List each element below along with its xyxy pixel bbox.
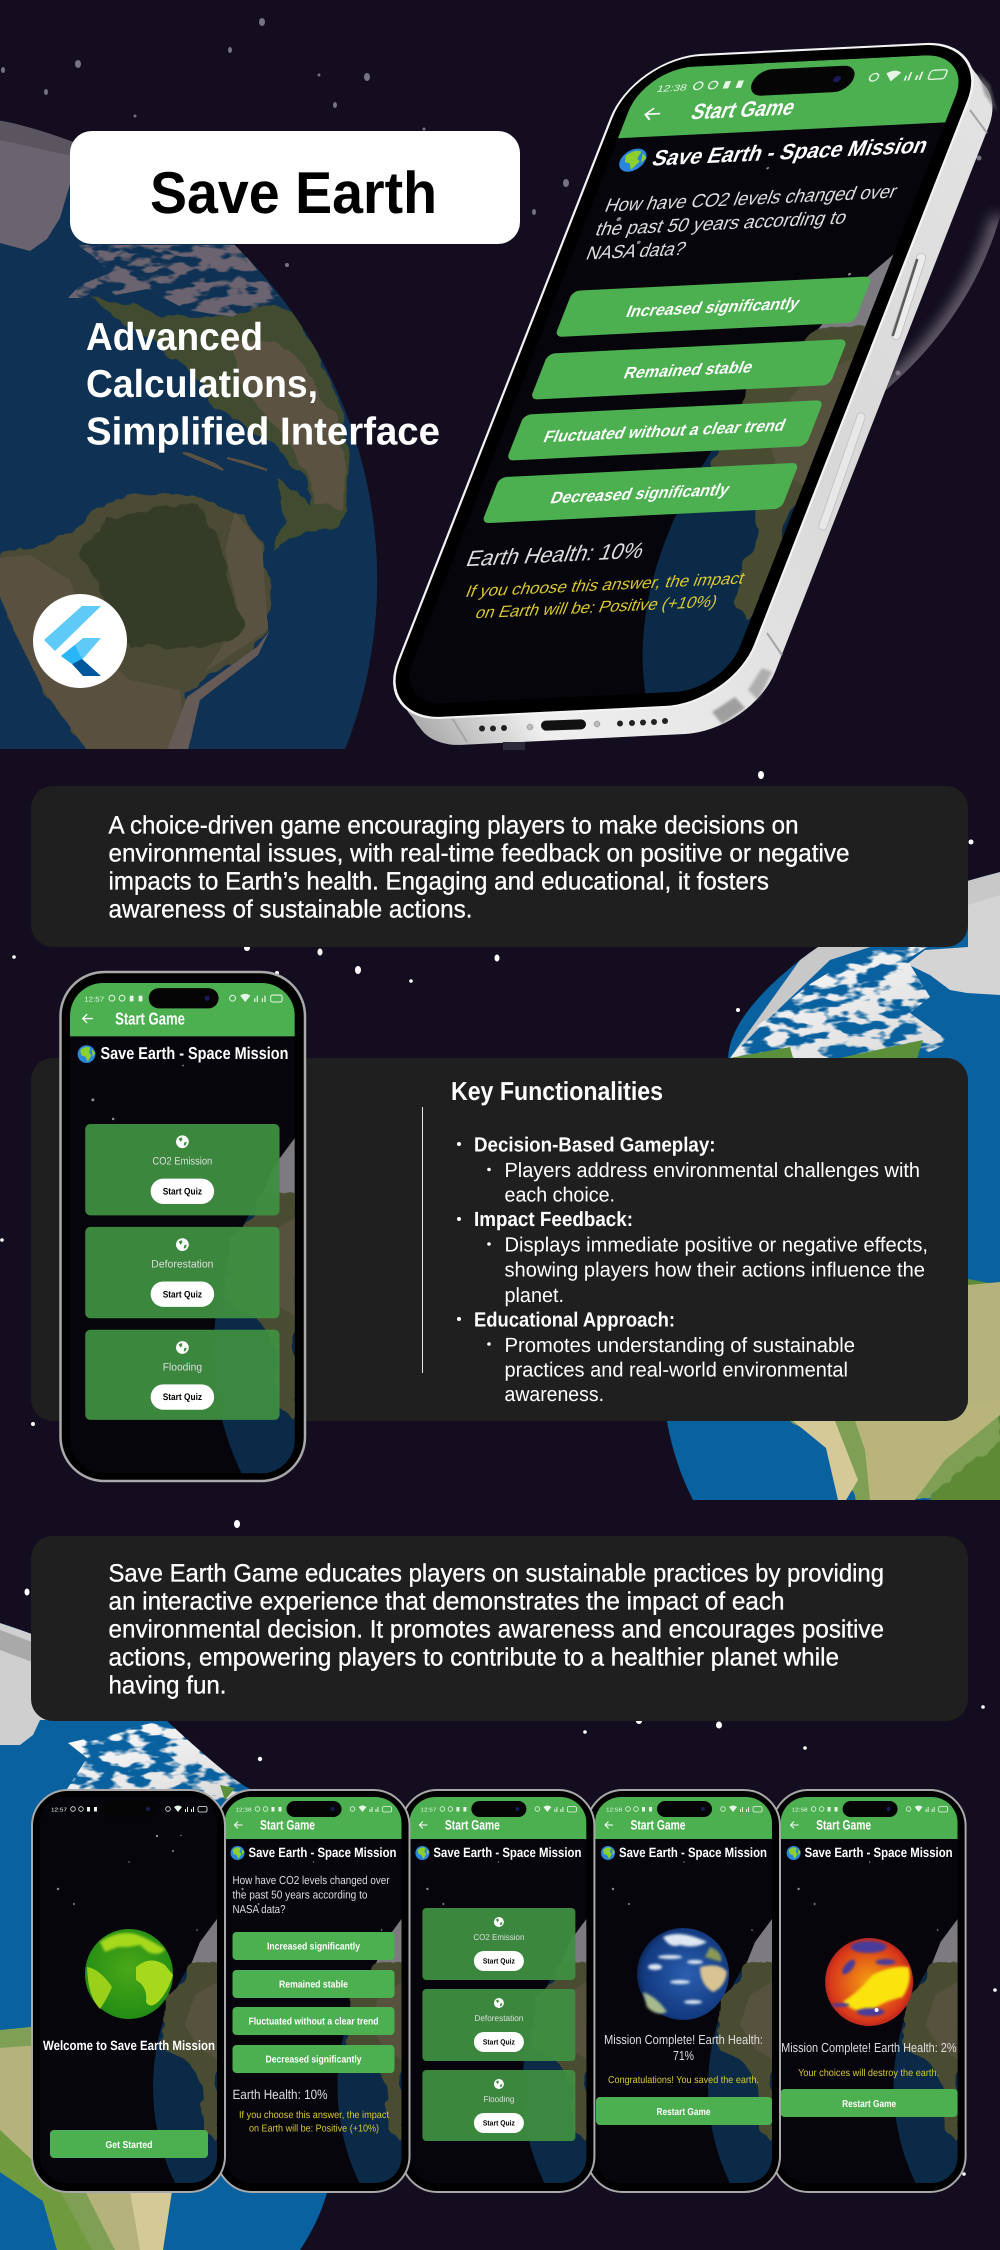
screen heading <box>619 138 926 172</box>
dark moon crescent behind hero phone <box>880 217 1000 395</box>
question text <box>586 186 898 260</box>
phone 2: question screen: Start Game <box>260 1818 315 1832</box>
phone 3: topic selection: Save Earth - Space Mission <box>433 1845 581 1860</box>
phone 2: question screen: 12:38 <box>236 1808 252 1814</box>
topic card: CO2: Start Quiz <box>483 1956 515 1966</box>
phone 4: saved earth ending: Save Earth - Space Mission <box>619 1845 767 1860</box>
panel: educational summary: an interactive experience that demonstrates the impact of each <box>108 1588 784 1616</box>
phone body extrusion <box>379 46 1000 748</box>
feature list: Displays immediate positive or negative effects, <box>504 1234 928 1256</box>
topic card: flooding: Flooding <box>163 1360 202 1373</box>
topic card: deforestation: Deforestation <box>474 2013 524 2023</box>
question text <box>232 1875 390 1916</box>
title card <box>70 131 520 244</box>
phone 4: saved earth ending: Congratulations! You saved the earth. <box>608 2075 759 2086</box>
hero subtitle: Simplified Interface <box>86 410 440 454</box>
question text: NASA data? <box>232 1904 286 1916</box>
phone 3: topic selection: Start Game <box>445 1818 500 1832</box>
hero phone <box>393 42 998 750</box>
topic card: flooding <box>85 1330 280 1420</box>
feature list: planet. <box>504 1284 564 1307</box>
panel: educational summary: having fun. <box>108 1671 226 1699</box>
starfield: hero (dim) <box>1 18 982 376</box>
result text: Mission Complete! Earth Health: 2% <box>781 2040 957 2055</box>
panel: intro description: environmental issues, with real-time feedback on positive or negative <box>108 839 850 867</box>
icon: flutter logo <box>33 594 127 688</box>
title card: Save Earth <box>150 160 437 226</box>
feature list: practices and real-world environmental <box>504 1359 848 1382</box>
question text: How have CO2 levels changed over <box>232 1875 390 1887</box>
feature list: showing players how their actions influence the <box>504 1259 925 1282</box>
heading: key functionalities: Key Functionalities <box>451 1076 663 1106</box>
hero subtitle: Calculations, <box>86 363 318 406</box>
panel: educational summary: Save Earth Game educates players on sustainable practices by providing <box>108 1559 884 1587</box>
answer buttons: Increased significantly <box>623 295 803 322</box>
impact message <box>466 573 745 618</box>
answer buttons: Decreased significantly <box>266 2055 362 2066</box>
answer buttons <box>232 1932 394 2073</box>
impact message: If you choose this answer, the impact <box>239 2110 389 2121</box>
impact message: on Earth will be: Positive (+10%) <box>472 593 720 623</box>
phone 5: destroyed earth ending: Save Earth - Space Mission <box>805 1845 953 1860</box>
panel: educational summary: actions, empowering players to contribute to a healthier planet while <box>108 1644 839 1672</box>
phone 3: topic selection: 12:57 <box>420 1808 436 1814</box>
welcome text: Welcome to Save Earth Mission <box>43 2038 215 2053</box>
restart button: Restart Game <box>656 2107 711 2118</box>
restart button: Restart Game <box>842 2099 896 2110</box>
topic card: CO2: Start Quiz <box>163 1186 202 1197</box>
answer buttons <box>482 276 872 523</box>
answer buttons: Fluctuated without a clear trend <box>540 417 788 447</box>
phone 4: saved earth ending: 12:58 <box>606 1808 622 1814</box>
topic card: flooding <box>422 2070 575 2141</box>
phone 1: welcome screen: 12:57 <box>51 1808 67 1814</box>
answer buttons: Remained stable <box>279 1980 348 1991</box>
question text: the past 50 years according to <box>592 209 850 241</box>
result text: Mission Complete! Earth Health: <box>604 2032 763 2047</box>
feature list: Promotes understanding of sustainable <box>504 1334 855 1357</box>
answer buttons: Increased significantly <box>267 1942 360 1953</box>
phone: topic selection (large): Save Earth - Space Mission <box>100 1044 288 1063</box>
phone 2: question screen: Save Earth - Space Mission <box>248 1845 396 1860</box>
topic card: deforestation: Start Quiz <box>163 1288 202 1300</box>
topic card: flooding: Start Quiz <box>483 2118 515 2128</box>
panel: intro description: awareness of sustainable actions. <box>108 896 472 924</box>
hero earth (dimmed globe) <box>0 120 378 749</box>
screen heading: Save Earth - Space Mission <box>649 133 932 171</box>
earth health: Earth Health: 10% <box>463 538 648 571</box>
feature list: Players address environmental challenges with <box>504 1159 920 1182</box>
answer buttons: Remained stable <box>621 359 756 384</box>
topic card: flooding: Start Quiz <box>163 1391 202 1403</box>
topic card: deforestation <box>422 1989 575 2061</box>
topic card: flooding: Flooding <box>483 2094 515 2104</box>
topic card: CO2 <box>85 1124 280 1215</box>
image: green globe <box>85 1929 173 2019</box>
feature list: awareness. <box>504 1383 604 1406</box>
topic card: deforestation: Deforestation <box>151 1257 214 1270</box>
answer buttons: Fluctuated without a clear trend <box>248 2017 378 2028</box>
impact message: If you choose this answer, the impact <box>463 570 747 602</box>
feature list: each choice. <box>504 1184 615 1207</box>
question text: How have CO2 levels changed over <box>602 183 900 217</box>
image: healthy earth <box>637 1928 729 2020</box>
phone 4: saved earth ending <box>590 1789 781 2193</box>
app bar <box>618 53 972 138</box>
earth health: Earth Health: 10% <box>232 2087 328 2102</box>
feature list <box>457 1134 928 1406</box>
phone 5: destroyed earth ending <box>776 1789 967 2193</box>
earth, bottom left <box>0 1600 350 2250</box>
image: burning earth <box>825 1938 913 2026</box>
question text: NASA data? <box>583 240 689 265</box>
panel: educational summary <box>31 1536 968 1721</box>
earth, right side <box>640 860 1000 1500</box>
impact message: on Earth will be: Positive (+10%) <box>249 2124 379 2134</box>
phone 1: welcome screen <box>31 1789 226 2193</box>
starfield: lower sections <box>0 771 997 2176</box>
feature list: Impact Feedback: <box>474 1208 633 1231</box>
phone 4: saved earth ending: 71% <box>673 2048 694 2063</box>
topic card: CO2: CO2 Emission <box>153 1154 213 1167</box>
topic card: deforestation: Start Quiz <box>483 2038 515 2046</box>
get started button <box>50 2130 208 2158</box>
phone 4: saved earth ending: Start Game <box>630 1818 686 1832</box>
phone 2: question screen <box>220 1789 410 2193</box>
phone: topic selection (large): 12:57 <box>84 996 104 1004</box>
app bar: Start Game <box>688 95 800 124</box>
phone 5: destroyed earth ending: Start Game <box>816 1818 871 1832</box>
impact message <box>239 2110 389 2134</box>
feature list: Educational Approach: <box>474 1309 675 1332</box>
restart button <box>781 2089 958 2117</box>
phone 5: destroyed earth ending: 12:58 <box>792 1808 808 1814</box>
restart button <box>596 2097 772 2125</box>
phone: topic selection (large): Start Game <box>115 1009 185 1028</box>
panel: intro description <box>31 786 968 947</box>
app bar: 12:38 <box>655 84 688 95</box>
feature list: Decision-Based Gameplay: <box>474 1134 716 1157</box>
hero subtitle: Advanced <box>86 316 263 359</box>
topic card: deforestation <box>85 1227 280 1318</box>
get started button: Get Started <box>106 2140 152 2151</box>
panel: key functionalities <box>31 1058 968 1421</box>
panel: educational summary: environmental decision. It promotes awareness and encourages positive <box>108 1615 884 1643</box>
panel: intro description: A choice-driven game encouraging players to make decisions on <box>108 812 798 840</box>
phone: topic selection (large) <box>59 970 306 1482</box>
topic card: CO2: CO2 Emission <box>473 1932 525 1942</box>
phone front and screen <box>393 42 974 719</box>
question text: the past 50 years according to <box>232 1890 368 1902</box>
topic card: CO2 <box>422 1908 575 1980</box>
hero subtitle <box>86 316 440 454</box>
panel: intro description: impacts to Earth’s health. Engaging and educational, it fosters <box>108 867 769 895</box>
phone 5: destroyed earth ending: Your choices will destroy the earth. <box>798 2068 939 2079</box>
answer buttons: Decreased significantly <box>547 482 733 508</box>
phone 3: topic selection <box>406 1789 596 2193</box>
